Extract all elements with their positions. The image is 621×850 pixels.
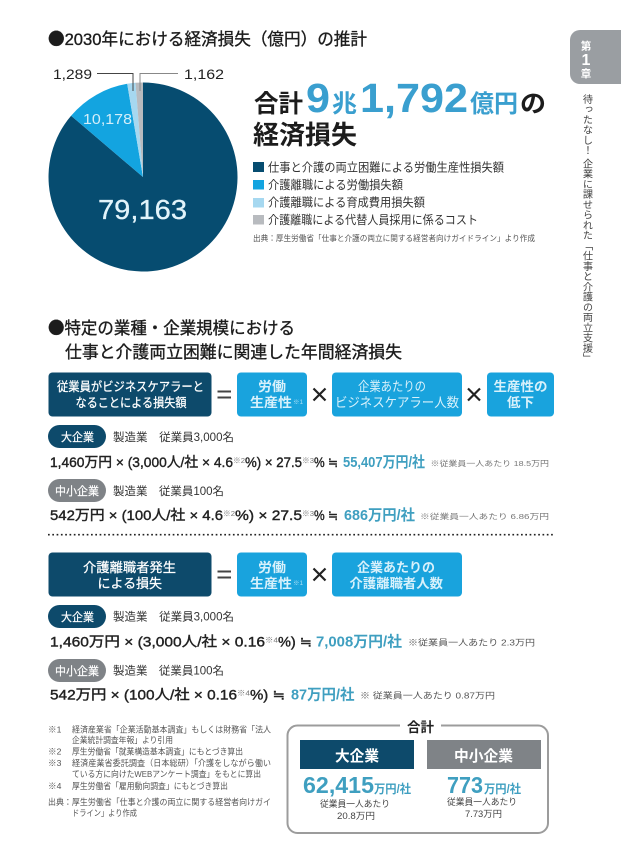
formula 2: 企業あたりの bbox=[357, 560, 435, 575]
large company total: 大企業 bbox=[335, 747, 379, 765]
small company total: 中小企業 bbox=[454, 747, 513, 765]
large company row 1: % ≒ bbox=[314, 454, 338, 470]
footnotes: ※2 bbox=[48, 746, 62, 756]
formula 2: 介護離職者発生 bbox=[83, 560, 176, 575]
pie legend: 介護離職による育成費用損失額 bbox=[268, 194, 425, 210]
small company row 2: ※ 従業員一人あたり 0.87万円 bbox=[360, 690, 495, 700]
footnotes: 厚生労働省「就業構造基本調査」にもとづき算出 bbox=[72, 746, 243, 756]
footnotes: 出典：厚生労働省「仕事と介護の両立に関する経営者向けガイ bbox=[48, 796, 271, 807]
small company row 2: %) ≒ bbox=[250, 686, 285, 702]
small company row 2: 87万円/社 bbox=[291, 686, 354, 704]
large company row 2 bbox=[48, 605, 535, 650]
large company row 1: ※3 bbox=[302, 456, 314, 465]
formula 1: 生産性の bbox=[494, 379, 548, 394]
heading: specific industry: ●特定の業種・企業規模における bbox=[48, 314, 295, 339]
large company row 2: 大企業 bbox=[61, 610, 94, 624]
pie chart: 10,178 bbox=[83, 112, 132, 128]
large company row 2: ※従業員一人あたり 2.3万円 bbox=[408, 638, 535, 648]
formula 2: 介護離職者人数 bbox=[350, 576, 443, 591]
small company row 1: ※3 bbox=[302, 509, 314, 518]
formula 1: 生産性 bbox=[250, 395, 292, 410]
total headline: 9 bbox=[306, 75, 330, 121]
large company row 1: 55,407万円/社 bbox=[343, 454, 425, 471]
footnotes: ドライン」より作成 bbox=[72, 807, 137, 818]
footnotes: 企業統計調査年報」より引用 bbox=[72, 734, 173, 745]
pie chart bbox=[49, 82, 238, 272]
small company row 1: 686万円/社 bbox=[344, 507, 415, 524]
formula 1: 労働 bbox=[258, 379, 286, 394]
chapter tab: 1 bbox=[582, 52, 591, 69]
pie label: 1,289 bbox=[53, 66, 133, 91]
large company total bbox=[300, 740, 414, 821]
footnotes: 経済産業省委託調査（日本総研）「介護をしながら働い bbox=[72, 757, 271, 768]
small company row 1: 製造業 従業員100名 bbox=[113, 484, 224, 498]
large company row 1: %) × 27.5 bbox=[245, 454, 302, 470]
footnotes: ※3 bbox=[48, 758, 62, 768]
heading: 2030 estimate: ●2030年における経済損失（億円）の推計 bbox=[48, 25, 367, 50]
formula 2: による損失 bbox=[98, 576, 162, 591]
large company total: 万円/社 bbox=[374, 781, 411, 796]
large company total: 従業員一人あたり bbox=[320, 798, 390, 809]
pie label: 1,289: 1,289 bbox=[53, 66, 92, 82]
formula 2: 労働 bbox=[258, 560, 286, 575]
heading: specific industry bbox=[48, 314, 402, 362]
large company row 1: ※2 bbox=[233, 456, 245, 465]
small company row 2 bbox=[48, 659, 495, 704]
chapter tab bbox=[570, 30, 621, 84]
total headline: 1,792 bbox=[360, 75, 468, 121]
large company row 2: 製造業 従業員3,000名 bbox=[113, 610, 234, 624]
formula 1: 企業あたりの bbox=[358, 379, 426, 394]
small company row 1 bbox=[48, 479, 549, 524]
formula 1 bbox=[48, 372, 554, 416]
footnotes: 厚生労働省「雇用動向調査」にもとづき算出 bbox=[72, 780, 228, 791]
pie legend: 介護離職による労働損失額 bbox=[268, 177, 403, 192]
small company row 2: 製造業 従業員100名 bbox=[113, 664, 224, 678]
footnotes: 経済産業省「企業活動基本調査」もしくは財務省「法人 bbox=[72, 724, 271, 734]
pie legend bbox=[253, 160, 504, 227]
total headline: 億円 bbox=[470, 90, 518, 118]
footnotes: ※4 bbox=[48, 781, 62, 791]
footnotes: ている方に向けたWEBアンケート調査」をもとに算出 bbox=[72, 768, 261, 779]
small company total bbox=[427, 740, 541, 819]
large company row 2: 1,460万円 × (3,000人/社 × 0.16 bbox=[50, 634, 265, 650]
panel: total bbox=[288, 720, 548, 833]
pie legend: 仕事と介護の両立困難による労働生産性損失額 bbox=[268, 160, 504, 174]
formula 1: なることによる損失額 bbox=[76, 395, 187, 410]
formula 1: ※1 bbox=[293, 399, 304, 406]
formula 1: 低下 bbox=[507, 395, 534, 410]
pie chart: 79,163 bbox=[98, 194, 187, 225]
vertical chapter title: 待ったなし！ 企業に課せられた「仕事と介護の両立支援」 bbox=[580, 93, 593, 363]
pie source note: 出典：厚生労働省「仕事と介護の両立に関する経営者向けガイドライン」より作成 bbox=[253, 233, 535, 243]
total headline: の bbox=[520, 91, 546, 118]
chapter tab: 第 bbox=[581, 40, 592, 52]
heading: specific industry: 仕事と介護両立困難に関連した年間経済損失 bbox=[65, 343, 402, 362]
small company row 1: % ≒ bbox=[314, 507, 338, 523]
large company row 1: 大企業 bbox=[61, 430, 94, 444]
small company row 1: 中小企業 bbox=[55, 484, 99, 498]
small company total: 7.73万円 bbox=[465, 809, 502, 819]
large company row 1: 製造業 従業員3,000名 bbox=[113, 430, 234, 444]
formula 2: ※1 bbox=[293, 580, 304, 587]
total headline: 兆 bbox=[332, 90, 357, 118]
formula 2: 生産性 bbox=[250, 576, 292, 591]
small company row 2: ※4 bbox=[237, 688, 250, 698]
formula 1: 従業員がビジネスケアラーと bbox=[57, 379, 204, 394]
large company row 1: ※従業員一人あたり 18.5万円 bbox=[430, 458, 549, 468]
pie label: 1,162: 1,162 bbox=[184, 66, 224, 82]
total headline: 合計 bbox=[254, 90, 303, 118]
small company total: 従業員一人あたり bbox=[447, 796, 517, 807]
total headline bbox=[253, 75, 546, 150]
pie label: 1,162 bbox=[140, 66, 224, 91]
small company total: 万円/社 bbox=[484, 781, 521, 796]
footnotes bbox=[48, 724, 271, 818]
formula 1: ビジネスケアラー人数 bbox=[335, 395, 459, 410]
small company row 1: 542万円 × (100人/社 × 4.6 bbox=[50, 507, 223, 523]
large company total: 20.8万円 bbox=[337, 811, 375, 821]
large company row 2: 7,008万円/社 bbox=[316, 634, 402, 650]
chapter tab: 章 bbox=[581, 67, 592, 80]
total headline: 経済損失 bbox=[253, 120, 357, 150]
small company row 1: %) × 27.5 bbox=[235, 507, 302, 523]
large company row 2: %) ≒ bbox=[278, 634, 312, 650]
small company row 2: 中小企業 bbox=[55, 664, 99, 678]
large company total: 62,415 bbox=[303, 772, 374, 798]
large company row 2: ※4 bbox=[265, 636, 278, 644]
formula 2 bbox=[48, 552, 462, 596]
small company row 2: 542万円 × (100人/社 × 0.16 bbox=[50, 686, 237, 702]
small company row 1: ※2 bbox=[223, 509, 235, 518]
total label: 合計 bbox=[407, 720, 434, 735]
large company row 1 bbox=[48, 425, 549, 471]
small company row 1: ※従業員一人あたり 6.86万円 bbox=[420, 511, 549, 521]
small company total: 773 bbox=[447, 772, 483, 798]
pie legend: 介護離職による代替人員採用に係るコスト bbox=[268, 212, 478, 227]
large company row 1: 1,460万円 × (3,000人/社 × 4.6 bbox=[50, 454, 233, 470]
footnotes: ※1 bbox=[48, 724, 62, 734]
